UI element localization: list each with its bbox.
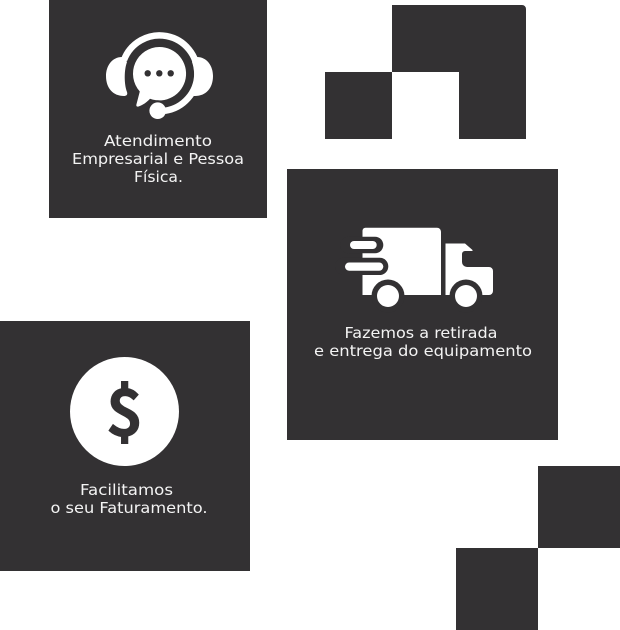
text: faturamento: o seu Faturamento. [50, 499, 208, 517]
text: atendimento [72, 132, 244, 186]
icon: dollar coin [70, 357, 179, 466]
text: retirada e entrega: e entrega do equipamento [314, 342, 532, 360]
panel: retirada e entrega [287, 169, 558, 440]
text: faturamento: Facilitamos [80, 481, 173, 499]
text: retirada e entrega: Fazemos a retirada [344, 324, 498, 342]
text: atendimento: Empresarial e Pessoa [72, 150, 244, 168]
text: faturamento [50, 481, 208, 517]
icon: headset with speech bubble [106, 35, 213, 121]
text: atendimento: Atendimento [104, 132, 212, 150]
text: atendimento: Física. [134, 168, 183, 186]
panel: atendimento [49, 0, 267, 218]
icon: delivery truck [335, 228, 493, 312]
icon: dollar coin: $ [107, 363, 142, 454]
decorative squares: bottom right [456, 466, 620, 630]
text: retirada e entrega [314, 324, 532, 360]
decorative squares: top right [325, 5, 526, 139]
panel: faturamento [0, 321, 250, 571]
